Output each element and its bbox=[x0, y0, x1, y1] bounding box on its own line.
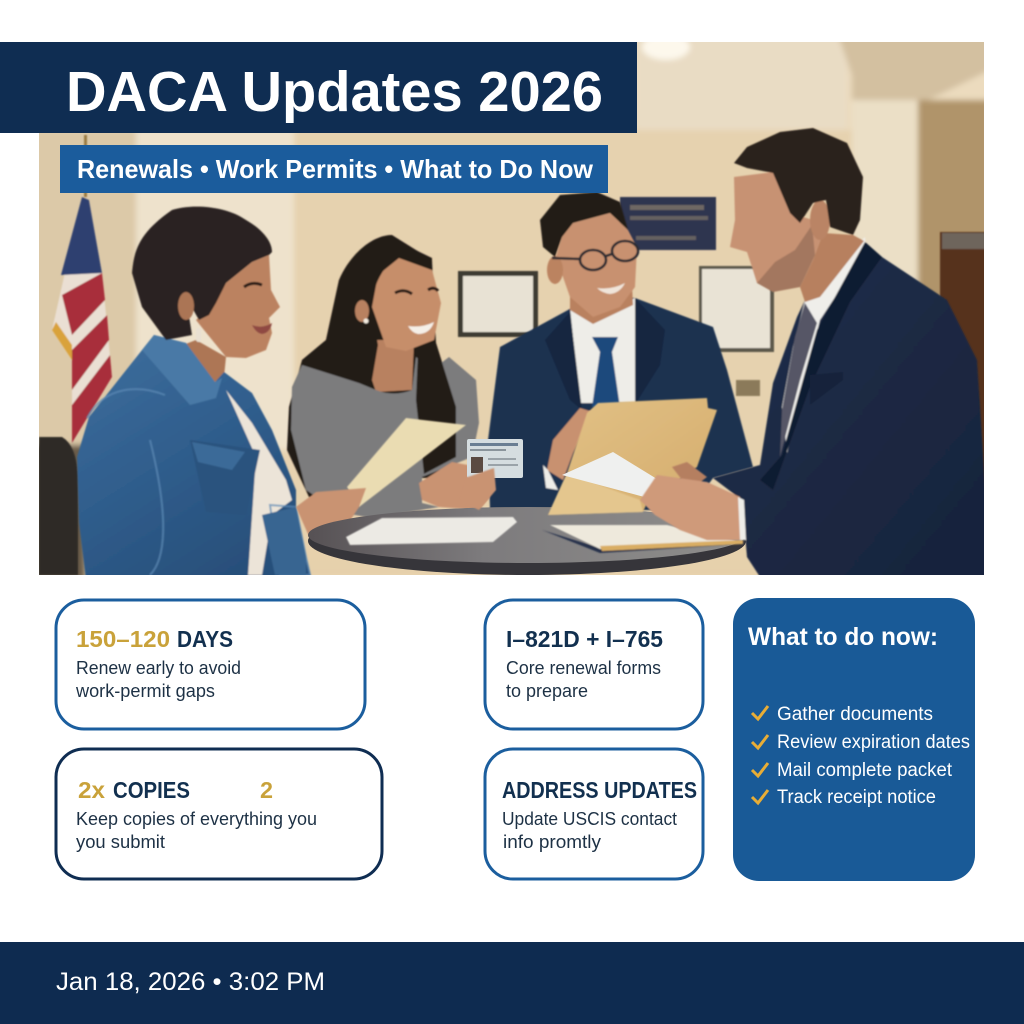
stacks of paper on table bbox=[346, 517, 743, 553]
checklist: Review expiration dates bbox=[777, 732, 970, 753]
checklist: Gather documents bbox=[777, 704, 933, 725]
footer date: Jan 18, 2026 • 3:02 PM bbox=[56, 968, 325, 996]
card: forms: to prepare bbox=[506, 680, 588, 701]
person: woman in denim jacket bbox=[77, 207, 312, 580]
card: address updates: info promtly bbox=[503, 831, 602, 852]
wall plaque bbox=[620, 197, 716, 250]
card: 150-120 days: 150–120 bbox=[76, 626, 170, 652]
flag bbox=[52, 135, 112, 443]
card: forms: Core renewal forms bbox=[506, 657, 661, 678]
card: 150-120 days: Renew early to avoid bbox=[76, 657, 241, 678]
checklist bbox=[752, 704, 970, 808]
footer bar bbox=[0, 942, 1024, 1024]
subtitle banner bbox=[60, 145, 608, 193]
card: 2x copies: Keep copies of everything you bbox=[76, 808, 317, 829]
table bbox=[308, 507, 746, 575]
panel: what to do now bbox=[733, 598, 975, 881]
checklist: Track receipt notice bbox=[777, 787, 936, 808]
chair bbox=[39, 437, 78, 575]
thumb over ID card bbox=[467, 468, 497, 510]
card: 2x copies bbox=[56, 749, 382, 879]
card: 2x copies: COPIES bbox=[113, 777, 190, 803]
card: 150-120 days: work-permit gaps bbox=[75, 680, 215, 701]
card: forms bbox=[485, 600, 703, 729]
card: 150-120 days bbox=[56, 600, 365, 729]
card: address updates: Update USCIS contact bbox=[502, 808, 677, 829]
card: 2x copies: 2 bbox=[260, 777, 273, 803]
person: woman in grey sweater bbox=[287, 235, 496, 518]
card: 150-120 days: DAYS bbox=[177, 626, 233, 652]
subtitle: Renewals • Work Permits • What to Do Now bbox=[77, 154, 594, 184]
woman's hand holding paper bbox=[295, 488, 366, 536]
person: man in dark suit at right bbox=[640, 128, 990, 580]
card: 2x copies: you submit bbox=[76, 831, 165, 852]
card: address updates: ADDRESS UPDATES bbox=[502, 777, 697, 803]
person: man with glasses in navy suit bbox=[488, 192, 753, 510]
framed certificates bbox=[458, 266, 774, 396]
door bbox=[939, 231, 984, 485]
card: address updates bbox=[485, 749, 703, 879]
ID card bbox=[467, 439, 523, 478]
card: 2x copies: 2x bbox=[78, 777, 105, 803]
title banner bbox=[0, 42, 637, 133]
office background bbox=[30, 34, 990, 580]
photo: four people reviewing documents in an office bbox=[30, 34, 990, 580]
folder held by man bbox=[548, 398, 717, 515]
tan paper in woman's hand bbox=[347, 418, 466, 507]
white paper in folder bbox=[562, 452, 656, 496]
panel heading: What to do now: bbox=[748, 623, 938, 651]
title: DACA Updates 2026 bbox=[66, 60, 603, 124]
card: forms: I–821D + I–765 bbox=[506, 626, 663, 652]
checklist: Mail complete packet bbox=[777, 760, 953, 781]
